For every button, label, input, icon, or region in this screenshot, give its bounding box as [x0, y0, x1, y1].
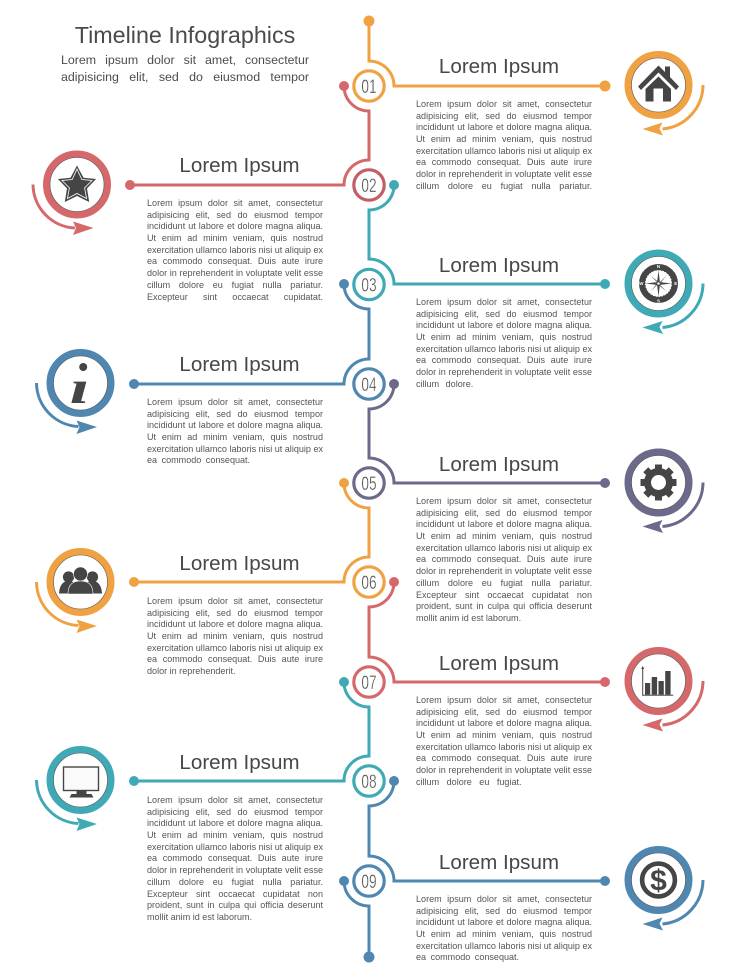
- body text 02: Lorem ipsum dolor sit amet, consectetur: [147, 198, 323, 208]
- body text 09: incididunt ut labore et dolore magna aliqua.: [416, 917, 592, 927]
- timeline segment 05: [369, 379, 610, 488]
- heading 01: Lorem Ipsum: [439, 55, 559, 78]
- icon: bar chart: [628, 650, 703, 732]
- body text 01: adipisicing elit, sed do eiusmod tempor: [416, 111, 592, 121]
- body text 01: cillum dolore eu fugiat nulla pariatur.: [416, 181, 592, 191]
- number badge 09: 09: [361, 871, 377, 893]
- number badge 04: [354, 369, 384, 399]
- body text 08: [147, 795, 323, 922]
- final timeline tail: [339, 876, 374, 962]
- timeline segment 02: [125, 81, 369, 190]
- timeline segment 03: [369, 180, 610, 289]
- body text 04: Ut enim ad minim veniam, quis nostrud: [147, 432, 323, 442]
- heading 08: Lorem Ipsum: [179, 751, 300, 774]
- heading 07: Lorem Ipsum: [439, 652, 559, 675]
- icon: compass: E: [674, 281, 677, 286]
- body text 03: adipisicing elit, sed do eiusmod tempor: [416, 309, 592, 319]
- body text 04: exercitation ullamco laboris nisi ut aliquip ex: [147, 444, 323, 454]
- body text 09: adipisicing elit, sed do eiusmod tempor: [416, 906, 592, 916]
- number badge 02: [354, 170, 384, 200]
- number badge 04: 04: [361, 374, 377, 396]
- timeline segment 09: [369, 776, 610, 886]
- icon: compass: N: [657, 264, 660, 269]
- body text 06: ea commodo consequat. Duis aute irure: [147, 654, 323, 664]
- body text 09: [416, 894, 592, 962]
- number badge 07: [354, 667, 384, 697]
- body text 05: Excepteur sint occaecat cupidatat non: [416, 590, 592, 600]
- body text 08: Excepteur sint occaecat cupidatat non: [147, 888, 323, 898]
- body text 01: Lorem ipsum dolor sit amet, consectetur: [416, 99, 592, 109]
- body text 08: proident, sunt in culpa qui officia deserunt: [147, 900, 323, 910]
- body text 05: adipisicing elit, sed do eiusmod tempor: [416, 508, 592, 518]
- body text 01: incididunt ut labore et dolore magna aliqua.: [416, 122, 592, 132]
- icon: star: [33, 154, 108, 235]
- heading 02: Lorem Ipsum: [179, 154, 300, 177]
- body text 01: ea commodo consequat. Duis aute irure: [416, 157, 592, 167]
- body text 02: ea commodo consequat. Duis aute irure: [147, 256, 323, 266]
- number badge 08: 08: [361, 771, 377, 793]
- body text 06: exercitation ullamco laboris nisi ut aliquip ex: [147, 643, 323, 653]
- body text 05: ea commodo consequat. Duis aute irure: [416, 554, 592, 564]
- body text 03: exercitation ullamco laboris nisi ut aliquip ex: [416, 344, 592, 354]
- body text 08: mollit anim id est laborum.: [147, 912, 252, 922]
- body text 02: Ut enim ad minim veniam, quis nostrud: [147, 233, 323, 243]
- body text 05: mollit anim id est laborum.: [416, 613, 521, 623]
- body text 01: dolor in reprehenderit in voluptate velit esse: [416, 169, 592, 179]
- number badge 05: [354, 468, 384, 498]
- body text 02: [147, 198, 323, 302]
- number badge 06: 06: [361, 572, 377, 594]
- number badge 02: 02: [361, 175, 377, 197]
- body text 06: dolor in reprehenderit.: [147, 666, 236, 676]
- heading 05: Lorem Ipsum: [439, 453, 559, 476]
- number badge 08: [354, 766, 384, 796]
- number badge 01: 01: [361, 76, 377, 98]
- body text 08: exercitation ullamco laboris nisi ut aliquip ex: [147, 842, 323, 852]
- body text 05: cillum dolore eu fugiat nulla pariatur.: [416, 578, 592, 588]
- body text 08: incididunt ut labore et dolore magna aliqua.: [147, 818, 323, 828]
- timeline segment 08: [129, 677, 369, 786]
- body text 01: [416, 99, 592, 191]
- number badge 03: [354, 269, 384, 300]
- body text 06: Ut enim ad minim veniam, quis nostrud: [147, 631, 323, 641]
- body text 02: Excepteur sint occaecat cupidatat.: [147, 292, 323, 302]
- body text 07: Lorem ipsum dolor sit amet, consectetur: [416, 695, 592, 705]
- timeline segment 04: [129, 279, 369, 389]
- icon: dollar coin: [628, 850, 703, 930]
- intro text: adipisicing elit, sed do eiusmod tempor: [61, 70, 309, 84]
- intro text: Lorem ipsum dolor sit amet, consectetur: [61, 53, 309, 67]
- body text 06: incididunt ut labore et dolore magna aliqua.: [147, 619, 323, 629]
- body text 07: ea commodo consequat. Duis aute irure: [416, 753, 592, 763]
- icon: information: ı: [70, 361, 89, 413]
- body text 04: adipisicing elit, sed do eiusmod tempor: [147, 409, 323, 419]
- body text 05: Lorem ipsum dolor sit amet, consectetur: [416, 496, 592, 506]
- body text 08: cillum dolore eu fugiat nulla pariatur.: [147, 877, 323, 887]
- body text 05: proident, sunt in culpa qui officia deserunt: [416, 601, 592, 611]
- body text 08: adipisicing elit, sed do eiusmod tempor: [147, 807, 323, 817]
- body text 06: Lorem ipsum dolor sit amet, consectetur: [147, 596, 323, 606]
- title: Timeline Infographics: [75, 22, 295, 48]
- body text 09: exercitation ullamco laboris nisi ut aliquip ex: [416, 941, 592, 951]
- body text 03: incididunt ut labore et dolore magna aliqua.: [416, 320, 592, 330]
- body text 03: Ut enim ad minim veniam, quis nostrud: [416, 332, 592, 342]
- body text 03: dolor in reprehenderit in voluptate velit esse: [416, 367, 592, 377]
- body text 07: exercitation ullamco laboris nisi ut aliquip ex: [416, 742, 592, 752]
- body text 09: ea commodo consequat.: [416, 952, 519, 962]
- body text 04: incididunt ut labore et dolore magna aliqua.: [147, 420, 323, 430]
- icon: house: [628, 54, 703, 136]
- number badge 07: 07: [361, 672, 377, 694]
- icon: compass: S: [657, 299, 660, 304]
- body text 02: exercitation ullamco laboris nisi ut aliquip ex: [147, 245, 323, 255]
- body text 06: adipisicing elit, sed do eiusmod tempor: [147, 608, 323, 618]
- heading 04: Lorem Ipsum: [179, 353, 300, 376]
- body text 09: Ut enim ad minim veniam, quis nostrud: [416, 929, 592, 939]
- body text 08: dolor in reprehenderit in voluptate velit esse: [147, 865, 323, 875]
- body text 05: incididunt ut labore et dolore magna aliqua.: [416, 519, 592, 529]
- body text 07: [416, 695, 592, 787]
- icon: computer monitor: [36, 750, 111, 831]
- body text 03: [416, 297, 592, 389]
- body text 05: dolor in reprehenderit in voluptate velit esse: [416, 566, 592, 576]
- body text 06: [147, 596, 323, 676]
- body text 07: adipisicing elit, sed do eiusmod tempor: [416, 707, 592, 717]
- body text 03: Lorem ipsum dolor sit amet, consectetur: [416, 297, 592, 307]
- body text 04: Lorem ipsum dolor sit amet, consectetur: [147, 397, 323, 407]
- heading 03: Lorem Ipsum: [439, 254, 559, 277]
- number badge 03: 03: [361, 274, 377, 296]
- heading 06: Lorem Ipsum: [179, 552, 300, 575]
- icon: information: [36, 352, 111, 434]
- body text 05: exercitation ullamco laboris nisi ut aliquip ex: [416, 543, 592, 553]
- body text 07: Ut enim ad minim veniam, quis nostrud: [416, 730, 592, 740]
- timeline segment 06: [129, 478, 369, 587]
- body text 05: Ut enim ad minim veniam, quis nostrud: [416, 531, 592, 541]
- icon: people group: [36, 552, 111, 633]
- body text 01: Ut enim ad minim veniam, quis nostrud: [416, 134, 592, 144]
- body text 09: Lorem ipsum dolor sit amet, consectetur: [416, 894, 592, 904]
- body text 04: [147, 397, 323, 465]
- intro text: [61, 53, 309, 84]
- timeline segment 07: [369, 577, 610, 687]
- body text 03: cillum dolore.: [416, 379, 473, 389]
- body text 02: dolor in reprehenderit in voluptate velit esse: [147, 268, 323, 278]
- number badge 09: [354, 866, 384, 896]
- icon: gear: [628, 452, 703, 533]
- heading 09: Lorem Ipsum: [439, 851, 559, 874]
- timeline segment 01: [364, 16, 610, 92]
- number badge 01: [354, 71, 384, 101]
- body text 04: ea commodo consequat.: [147, 455, 250, 465]
- body text 08: ea commodo consequat. Duis aute irure: [147, 853, 323, 863]
- body text 03: ea commodo consequat. Duis aute irure: [416, 355, 592, 365]
- body text 01: exercitation ullamco laboris nisi ut aliquip ex: [416, 146, 592, 156]
- icon: compass: [628, 253, 703, 334]
- body text 02: adipisicing elit, sed do eiusmod tempor: [147, 210, 323, 220]
- number badge 05: 05: [361, 473, 377, 495]
- body text 07: dolor in reprehenderit in voluptate velit esse: [416, 765, 592, 775]
- number badge 06: [354, 567, 384, 597]
- body text 08: Lorem ipsum dolor sit amet, consectetur: [147, 795, 323, 805]
- body text 02: incididunt ut labore et dolore magna aliqua.: [147, 221, 323, 231]
- body text 07: cillum dolore eu fugiat.: [416, 777, 522, 787]
- body text 07: incididunt ut labore et dolore magna aliqua.: [416, 718, 592, 728]
- body text 02: cillum dolore eu fugiat nulla pariatur.: [147, 280, 323, 290]
- body text 08: Ut enim ad minim veniam, quis nostrud: [147, 830, 323, 840]
- body text 05: [416, 496, 592, 623]
- icon: compass: W: [639, 281, 644, 286]
- icon: dollar coin: $: [650, 864, 667, 898]
